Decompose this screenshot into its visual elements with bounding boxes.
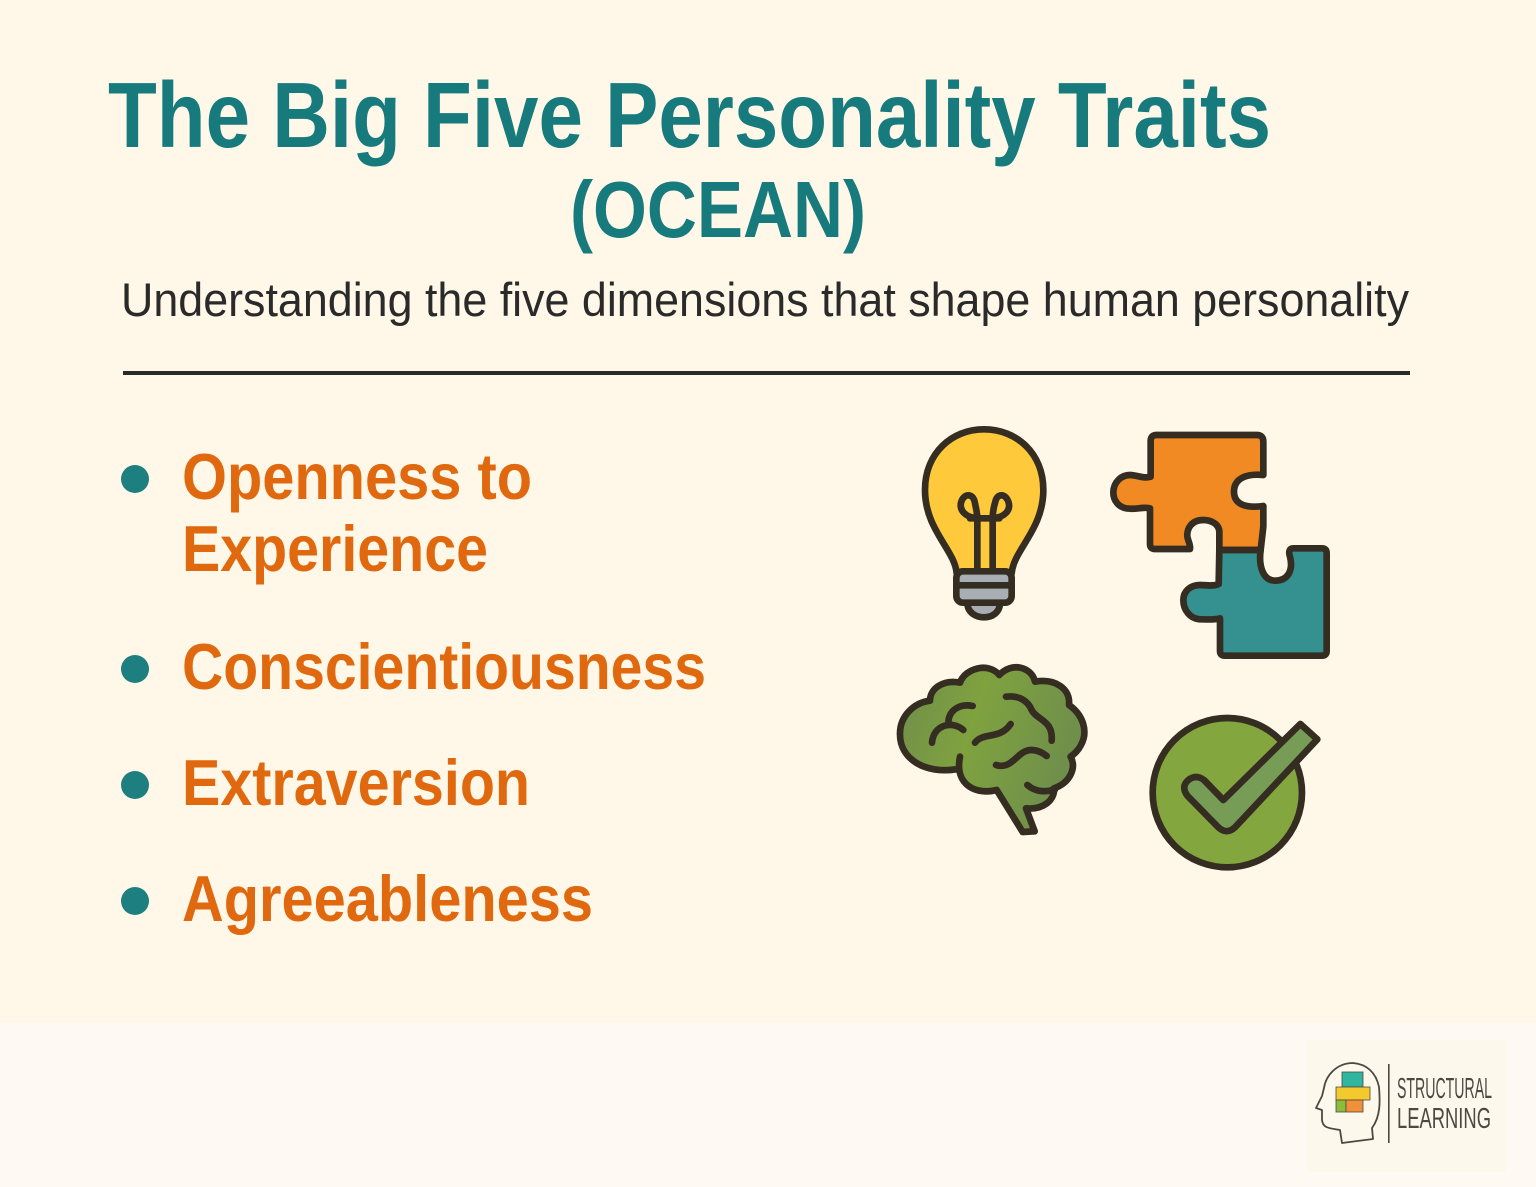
logo (1307, 1040, 1506, 1172)
logo: wordmark (1397, 1073, 1492, 1135)
trait list (121, 440, 706, 935)
logo: coloured blocks (1336, 1072, 1370, 1112)
teal puzzle piece (1183, 548, 1327, 656)
trait: openness to experience: Openness to (182, 440, 532, 513)
orange puzzle piece (1113, 435, 1263, 550)
icon: check mark (1153, 718, 1317, 867)
trait: conscientiousness: Conscientiousness (182, 630, 706, 703)
icon: puzzle pieces (1113, 435, 1327, 656)
logo: head outline (1316, 1063, 1380, 1143)
title (108, 63, 1271, 254)
icon: light bulb (925, 429, 1043, 617)
title: (OCEAN) (570, 165, 866, 254)
trait: extraversion: Extraversion (182, 746, 530, 819)
title: The Big Five Personality Traits (108, 63, 1271, 167)
trait: agreeableness: Agreeableness (182, 862, 593, 935)
subtitle: Understanding the five dimensions that shape human personality (121, 273, 1409, 326)
trait: openness to experience: Experience (182, 512, 488, 585)
trait: openness to experience (121, 440, 532, 585)
icon: brain (900, 667, 1084, 832)
